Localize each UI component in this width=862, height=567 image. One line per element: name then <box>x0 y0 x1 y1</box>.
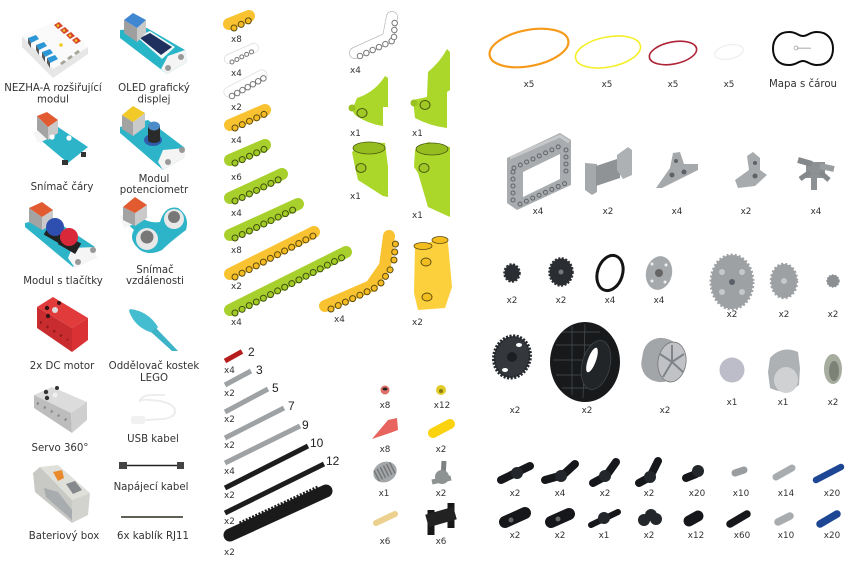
black o-ring <box>593 252 627 306</box>
module: DC motor <box>30 297 95 372</box>
grey rim <box>638 335 689 416</box>
qty: x2 <box>644 531 654 541</box>
qty: x4 <box>654 296 665 306</box>
red band <box>647 38 699 90</box>
beam: green 9 <box>230 204 299 256</box>
qty: x8 <box>380 401 390 411</box>
qty: x2 <box>582 406 592 416</box>
label: x4 <box>231 69 242 79</box>
connector 1-5 <box>686 465 706 499</box>
panel: connectors <box>501 461 841 541</box>
qty: x4 <box>224 467 235 477</box>
label: distance sensor: Snímač <box>136 265 174 276</box>
module: servo <box>32 386 88 454</box>
tan pin <box>376 514 395 547</box>
panel piece: yellow cylinder <box>412 236 452 328</box>
connector 1-3 <box>593 462 616 499</box>
H connector <box>585 147 632 217</box>
beam: yellow 5 <box>230 110 267 146</box>
cable: RJ11 <box>117 517 189 542</box>
number: 2 <box>248 345 255 359</box>
qty: x1 <box>727 398 737 408</box>
qty: x2 <box>224 415 235 425</box>
qty: x2 <box>603 207 613 217</box>
panel: beams <box>229 16 452 328</box>
label: x4 <box>334 315 345 325</box>
label: RJ11: 6x kablík RJ11 <box>117 530 189 542</box>
module: line sensor <box>31 112 93 193</box>
connector 2-6 <box>730 514 751 541</box>
axle 2 <box>224 345 255 376</box>
label: NEZHA-A: modul <box>37 94 69 106</box>
qty: x20 <box>689 489 706 499</box>
axle 12 <box>224 454 340 527</box>
label: distance sensor: vzdálenosti <box>126 275 184 287</box>
qty: x2 <box>660 406 670 416</box>
line map <box>769 32 837 90</box>
module: distance sensor <box>120 197 187 287</box>
panel: rubber bands and map <box>486 23 837 90</box>
beam: yellow bent <box>325 236 396 325</box>
panel piece: green D <box>412 142 450 221</box>
qty: x1 <box>599 531 609 541</box>
label: battery: Bateriový box <box>29 530 99 542</box>
qty: x2 <box>507 296 517 306</box>
large grey gear <box>711 255 753 320</box>
qty: x6 <box>436 537 447 547</box>
number: 5 <box>272 381 279 395</box>
module: OLED display <box>118 13 190 106</box>
panel: axles <box>224 345 340 558</box>
cable: USB <box>127 395 179 445</box>
qty: x2 <box>555 531 565 541</box>
label: motor: 2x DC motor <box>30 361 95 372</box>
number: 9 <box>302 418 309 432</box>
qty: x2 <box>510 406 520 416</box>
label: Mapa s čárou <box>769 78 837 90</box>
yellow pin <box>433 424 450 455</box>
qty: x2 <box>224 441 235 451</box>
qty: x4 <box>672 207 683 217</box>
label: x2 <box>412 318 423 328</box>
qty: x8 <box>380 445 390 455</box>
white band <box>713 42 745 90</box>
number: 3 <box>256 363 263 377</box>
qty: x5 <box>524 80 534 90</box>
qty: x1 <box>379 489 389 499</box>
medium grey gear <box>771 264 797 320</box>
qty: x12 <box>688 531 704 541</box>
number: 7 <box>288 399 295 413</box>
qty: x2 <box>556 296 566 306</box>
red wedge <box>372 418 398 455</box>
panel: electronics <box>4 13 199 542</box>
triangle liftarm <box>656 152 698 217</box>
label: x4 <box>231 209 242 219</box>
pin 1-7 <box>776 468 795 499</box>
beam: yellow 11 <box>230 232 315 292</box>
qty: x20 <box>824 531 841 541</box>
beam: green 7 <box>230 174 284 219</box>
label: x1 <box>412 211 423 221</box>
qty: x5 <box>724 80 734 90</box>
pin 2-8 <box>820 514 841 541</box>
label: x1 <box>350 129 361 139</box>
qty: x2 <box>741 207 751 217</box>
qty: x2 <box>644 489 654 499</box>
axle 5 <box>224 381 279 425</box>
label: power: Napájecí kabel <box>114 481 188 493</box>
beam: green 15 <box>230 252 347 328</box>
connector 1-2 <box>545 464 575 499</box>
qty: x2 <box>224 389 235 399</box>
label: x1 <box>412 129 423 139</box>
gear rack <box>224 488 326 558</box>
yellow bush <box>434 385 450 411</box>
connector 2-2 <box>551 514 569 541</box>
tyre <box>550 322 620 416</box>
ball <box>720 358 744 408</box>
axle 9 <box>224 418 309 477</box>
label: x2 <box>231 103 242 113</box>
qty: x4 <box>533 207 544 217</box>
qty: x2 <box>828 398 838 408</box>
qty: x10 <box>733 489 750 499</box>
connector 2-3 <box>591 512 618 541</box>
label: x6 <box>231 173 242 183</box>
qty: x2 <box>828 310 838 320</box>
red stud <box>380 386 390 411</box>
qty: x5 <box>602 80 612 90</box>
qty: x2 <box>224 548 235 558</box>
qty: x4 <box>555 489 566 499</box>
T liftarm <box>735 152 767 217</box>
connector 1-1 <box>501 466 530 499</box>
worm gear <box>370 458 400 499</box>
qty: x1 <box>778 398 788 408</box>
label: NEZHA-A: NEZHA-A rozšiřující <box>4 83 102 94</box>
qty: x2 <box>600 489 610 499</box>
pin 2-7 <box>778 516 795 541</box>
qty: x2 <box>779 310 789 320</box>
connector 2-4 <box>638 509 662 541</box>
qty: x2 <box>224 491 235 501</box>
axle 7 <box>224 399 295 451</box>
qty: x2 <box>510 531 520 541</box>
module: NEZHA-A expansion <box>4 20 103 106</box>
grey pulley <box>643 254 675 306</box>
label: buttons: Modul s tlačítky <box>23 275 103 287</box>
orange band <box>486 23 572 90</box>
connector 1-4 <box>639 461 658 499</box>
qty: x2 <box>224 517 235 527</box>
label: x8 <box>231 246 242 256</box>
number: 12 <box>326 454 340 468</box>
grey connector <box>432 461 451 499</box>
panel piece: green B <box>410 49 450 139</box>
beam: white 7 <box>229 75 264 113</box>
label: OLED: displej <box>138 94 170 106</box>
module: battery box <box>29 465 99 542</box>
label: separator: Oddělovač kostek <box>109 361 199 372</box>
qty: x2 <box>436 445 446 455</box>
label: line sensor: Snímač čáry <box>31 181 93 193</box>
label: potentiometer: potenciometr <box>120 185 189 196</box>
panel: frames <box>507 133 834 217</box>
label: x8 <box>231 35 242 45</box>
qty: x2 <box>436 489 446 499</box>
pin 1-8 <box>816 467 841 499</box>
label: USB: USB kabel <box>127 434 179 445</box>
qty: x6 <box>380 537 391 547</box>
axle 3 <box>224 363 263 399</box>
tool: brick separator <box>109 309 199 384</box>
small grey gear <box>827 275 839 320</box>
panel piece: green A <box>348 76 388 139</box>
ball socket <box>768 350 800 408</box>
connector 2-1 <box>505 513 525 541</box>
panel piece: green C <box>350 142 388 202</box>
qty: x5 <box>668 80 678 90</box>
yellow band <box>573 31 643 90</box>
beam: white L <box>350 17 395 76</box>
qty: x2 <box>727 310 737 320</box>
qty: x12 <box>434 401 450 411</box>
cross connector <box>798 160 834 217</box>
black gear <box>550 258 572 306</box>
qty: x4 <box>605 296 616 306</box>
panel: small parts <box>370 385 455 547</box>
beam: white 5 <box>229 48 255 79</box>
label: separator: LEGO <box>140 373 168 384</box>
qty: x4 <box>811 207 822 217</box>
label: servo: Servo 360° <box>32 443 88 454</box>
connector 2-5 <box>688 516 704 541</box>
label: x1 <box>350 192 361 202</box>
beam: green 5 <box>230 145 267 183</box>
module: buttons <box>23 202 103 287</box>
label: x4 <box>350 66 361 76</box>
pin 1-6 <box>733 470 750 499</box>
cable: power <box>114 462 188 493</box>
small cone <box>824 354 842 408</box>
panel: gears and wheels <box>489 252 842 416</box>
rectangular frame <box>507 133 571 217</box>
black connector <box>427 503 455 547</box>
qty: x2 <box>510 489 520 499</box>
small black gear <box>504 264 520 306</box>
label: x4 <box>231 318 242 328</box>
qty: x4 <box>224 366 235 376</box>
label: OLED: OLED grafický <box>118 83 190 94</box>
label: potentiometer: Modul <box>139 174 169 185</box>
label: x2 <box>231 282 242 292</box>
number: 10 <box>310 436 324 450</box>
axle 10 <box>224 436 324 501</box>
qty: x20 <box>824 489 841 499</box>
label: x4 <box>231 136 242 146</box>
qty: x14 <box>778 489 795 499</box>
beam: yellow 3 <box>229 16 250 45</box>
qty: x60 <box>734 531 751 541</box>
black spoked wheel <box>489 332 535 416</box>
qty: x10 <box>778 531 795 541</box>
module: potentiometer <box>120 106 189 196</box>
